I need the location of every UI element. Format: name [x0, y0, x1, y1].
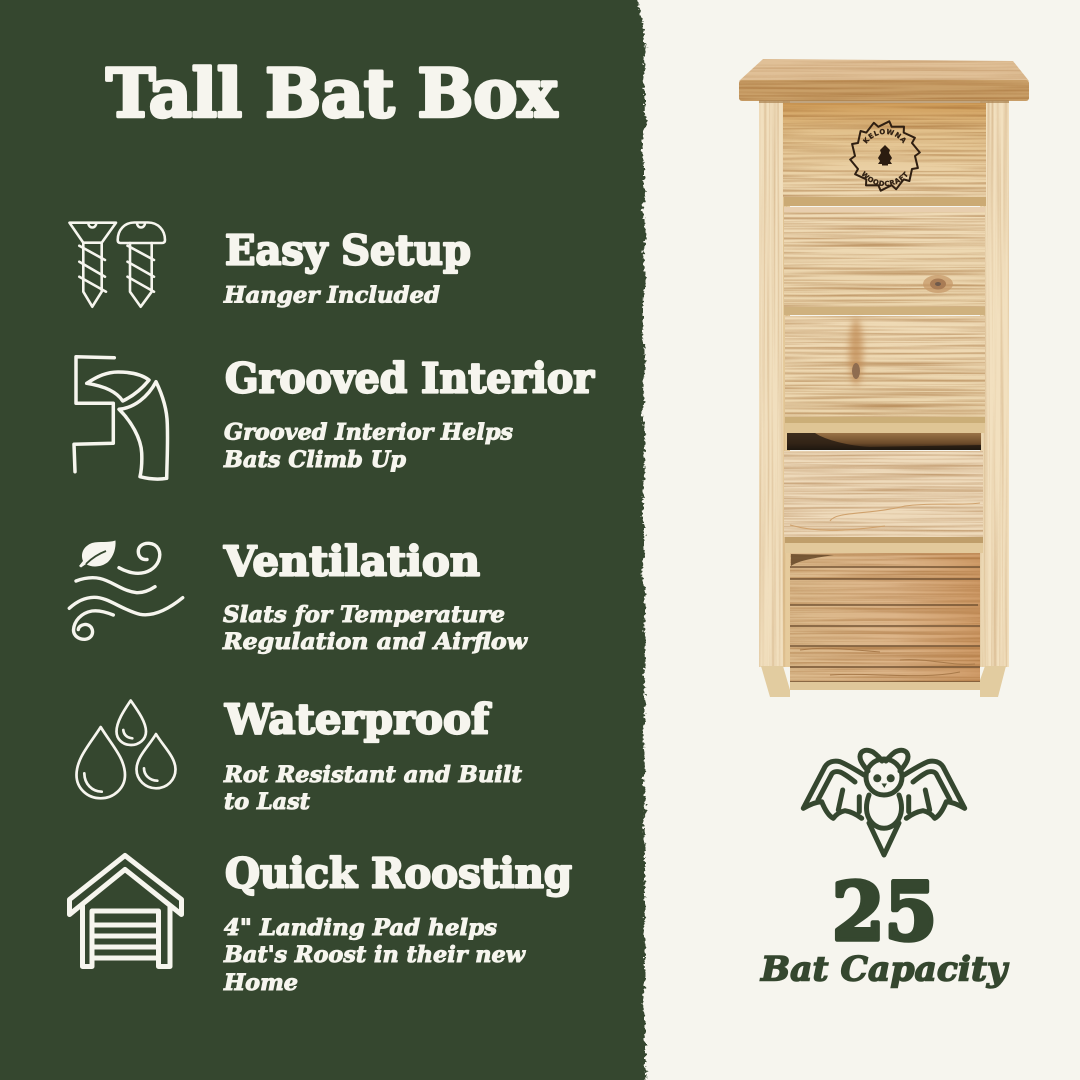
- left post: [759, 100, 790, 697]
- feature: ventilation: [69, 538, 528, 655]
- feature: quick roosting: [70, 850, 572, 996]
- icon: screws: [70, 222, 165, 307]
- lower interior slats: [790, 553, 980, 690]
- text: quick roosting description: Home: [223, 970, 298, 996]
- icon: grooved tube: [74, 357, 168, 479]
- heading: waterproof: Waterproof: [224, 696, 491, 744]
- logo: saw blade brand: WOODCRAFT: [862, 170, 908, 186]
- logo: saw blade brand: KELOWNA: [862, 128, 906, 144]
- panel 2 with knot: [784, 207, 985, 315]
- icon: wind and leaf: [69, 540, 183, 639]
- text: ventilation description: Regulation and Airflow: [222, 629, 528, 655]
- product illustration: wooden bat box: [739, 59, 1029, 697]
- right post: [980, 100, 1009, 697]
- logo: saw blade brand: [849, 120, 921, 192]
- feature: easy setup: [70, 222, 471, 308]
- panel: green feature panel with torn edge: [0, 0, 647, 1080]
- text: hanger included: Hanger Included: [223, 282, 440, 308]
- icon: water drops: [76, 700, 176, 798]
- feature: grooved interior: [74, 354, 595, 479]
- stat: bat capacity: [760, 864, 1009, 990]
- heading: quick roosting: Quick Roosting: [225, 850, 572, 898]
- icon: bat: [803, 750, 965, 855]
- title: Tall Bat Box: [106, 54, 558, 132]
- text: waterproof description: to Last: [224, 789, 310, 815]
- icon: garage house: [70, 856, 182, 966]
- heading: ventilation: Ventilation: [223, 538, 480, 586]
- number: 25: 25: [832, 864, 937, 958]
- panel 4: [784, 451, 983, 553]
- heading: grooved interior: Grooved Interior: [225, 354, 595, 402]
- panel 3 with knot: [785, 316, 985, 433]
- feature: waterproof: [76, 696, 522, 815]
- text: grooved interior description: Grooved Interior Helps: [224, 420, 513, 446]
- entry gap: [787, 433, 981, 450]
- panel 1 with logo: [783, 103, 986, 206]
- text: quick roosting description: 4" Landing Pad helps: [224, 915, 497, 941]
- label: bat capacity: Bat Capacity: [760, 950, 1009, 990]
- text: ventilation description: Slats for Temperature: [223, 602, 505, 628]
- text: quick roosting description: Bat's Roost in their new: [223, 942, 526, 968]
- text: waterproof description: Rot Resistant and Built: [223, 762, 522, 788]
- roof: [739, 59, 1029, 103]
- heading: easy setup: Easy Setup: [225, 226, 471, 274]
- text: grooved interior description: Bats Climb Up: [223, 447, 407, 473]
